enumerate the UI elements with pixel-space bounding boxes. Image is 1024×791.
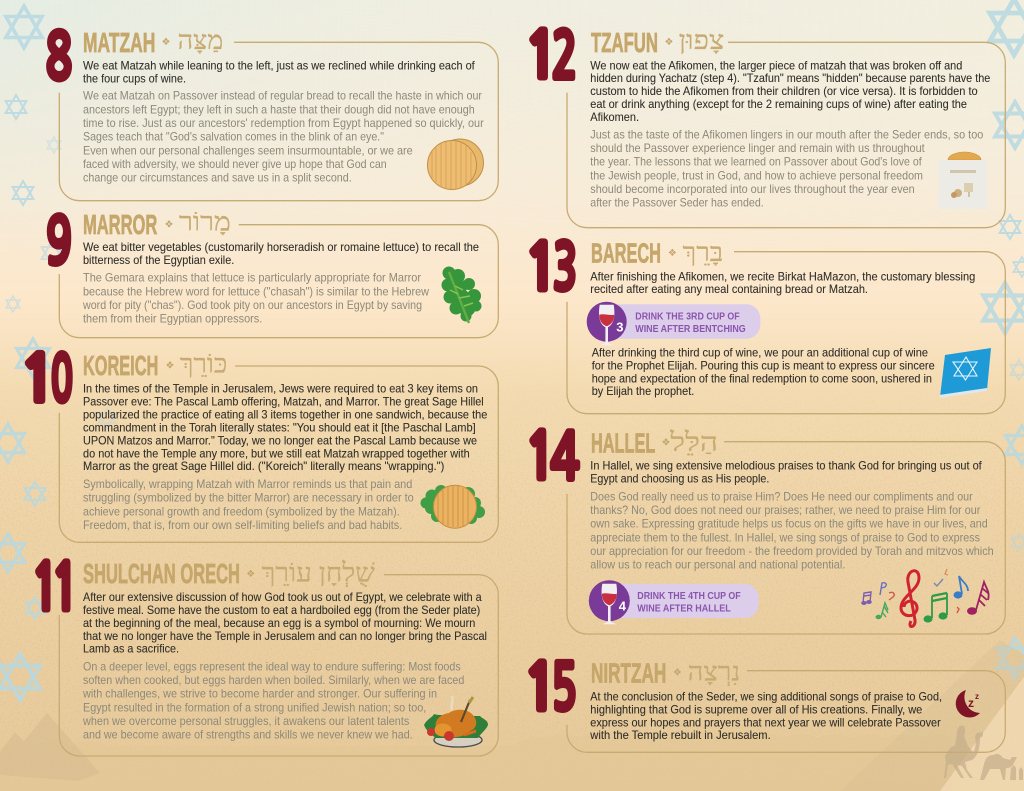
panel border [59,575,498,756]
panel: step 13 barech [525,236,1005,414]
primary text: Egypt and choosing us as His people. [590,473,769,486]
heading: Tzafun: צָפוּן [679,26,724,55]
secondary text [590,129,983,210]
primary text: hidden during Yachatz (step 4). "Tzafun" means "hidden" because parents have the [590,72,990,85]
icon: blue book [939,348,991,398]
primary text [589,690,942,742]
panel: step 12 tzafun [525,24,1005,228]
magenta note [967,582,989,615]
heading: Hallel: ❖ [662,438,671,448]
primary text: At the conclusion of the Seder, we sing additional songs of praise to God, [590,690,942,703]
step number 14 [525,425,580,489]
callout: fourth cup of wine: WINE AFTER HALLEL [637,602,731,614]
heading: Tzafun: TZAFUN [591,27,658,58]
icon: sleeping moon: z [975,692,979,701]
secondary text: because the Hebrew word for lettuce ("chasah") is similar to the Hebrew [83,285,430,298]
secondary text: Symbolically, wrapping Matzah with Marror reminds us that pain and [83,478,412,491]
secondary text: should the Passover experience linger and remain with us throughout [590,142,925,155]
secondary text: The Gemara explains that lettuce is particularly appropriate for Marror [83,272,421,285]
step number 8: 8 [46,26,72,90]
icon: camels silhouette [944,725,1023,780]
icon: wine glass [599,305,623,345]
primary text: custom to hide the Afikomen from their children (or vice versa). It is forbidden to [590,85,978,98]
step number 14: 4 [550,425,580,489]
blue note [954,576,968,599]
icon: matzah wrapped in lettuce [420,485,485,528]
secondary text: change our circumstances and save us in a split second. [83,172,352,185]
primary text [590,460,982,486]
icon: wine glass [602,584,627,624]
primary text: Marror as the great Sage Hillel did. ("Koreich" literally means "wrapping.") [83,460,444,473]
secondary text [82,660,464,742]
primary text: eat or drink anything (except for the 2 remaining cups of wine) after eating the [590,98,967,111]
panel border [567,42,1005,228]
heading: Nirtzah: NIRTZAH [591,657,666,688]
primary text [590,59,990,124]
heading: Nirtzah: נִרְצָה [688,658,740,687]
step number 14: 1 [525,427,555,489]
heading: Koreich: KOREICH [83,350,158,381]
primary text: with the Temple rebuilt in Jerusalem. [589,729,771,742]
callout: third cup of wine [587,302,760,345]
step number 12: 2 [552,24,578,88]
callout: fourth cup of wine [589,580,759,624]
secondary text: thanks? No, God does not need our praises; rather, we need to praise Him for our [590,504,980,517]
primary text: Passover eve: The Pascal Lamb offering, Matzah, and Marror. The great Sage Hillel [83,396,484,409]
heading: Shulchan Orech: SHULCHAN ORECH [83,558,240,589]
secondary text [590,490,994,572]
heading: Koreich: ❖ [166,360,175,372]
icon: matzah [428,139,484,190]
panel: step 10 koreich [20,348,498,542]
primary text [83,383,487,473]
secondary text: soften when cooked, but eggs harden when boiled. Similarly, when we are faced [83,674,464,687]
secondary text: by Elijah the prophet. [592,385,694,398]
icon: right pyramid [840,640,1024,791]
icon: music notes [861,569,989,627]
panel: step 8 matzah [46,26,498,201]
secondary text: hope and expectation of the final redemption to come soon, ushered in [592,372,932,385]
secondary text: Sages teach that "God's salvation comes in the blink of an eye." [83,131,384,144]
primary text: highlighting that God is supreme over all of His creations. Finally, we [590,703,922,716]
secondary text: Does God really need us to praise Him? Does He need our compliments and our [590,490,973,503]
step number 15 [524,656,577,720]
heading: Matzah: ❖ [162,37,171,48]
heading: Marror: מָרוֹר [179,208,231,237]
primary text [83,591,487,656]
heading: Marror: ❖ [165,220,174,230]
callout: third cup of wine: DRINK THE 3RD CUP OF [635,311,740,323]
secondary text [82,272,430,326]
step number 13: 1 [525,237,558,299]
heading: Hallel: הַלֵּל [669,428,718,457]
icon: afikomen bag [938,152,987,209]
primary text: express our hopes and prayers that next year we will celebrate Passover [590,716,941,729]
secondary text: faced with adversity, we should never give up hope that God can [83,158,387,171]
dune band [0,734,952,791]
step number 11: 1 [52,558,78,620]
icon: left pyramids [0,713,100,781]
primary text: bitterness of the Egyptian exile. [83,254,234,267]
green beamed notes [924,593,948,623]
step number 10: 0 [51,348,73,412]
secondary text: achieve personal growth and freedom (symbolized by the Matzah). [83,505,400,518]
secondary text: struggling (symbolized by the bitter Marror) are necessary in order to [83,492,414,505]
panel border [567,442,1005,634]
step number 15: 1 [524,657,557,719]
primary text [590,270,975,296]
step number 10: 1 [20,349,56,411]
primary text: at the beginning of the meal, because an egg is a symbol of mourning: We mourn [83,617,475,630]
panel border [567,671,1005,752]
primary text [83,60,475,86]
panel: step 9 marror [46,208,498,338]
primary text: do not have the Temple any more, but we still eat Matzah wrapped together with [83,447,470,460]
step number 10 [20,348,73,412]
secondary text: time to rise. Just as our ancestors' redemption from Egypt happened so quickly, our [83,117,484,130]
secondary text: our appreciation for our freedom - the freedom provided by Torah and mitzvos which [590,545,994,558]
heading: Nirtzah: ❖ [673,668,682,678]
step number 9: 9 [46,210,72,274]
secondary text: when we overcome personal struggles, it awakens our latent talents [82,715,409,728]
primary text: In the times of the Temple in Jerusalem, Jews were required to eat 3 key items on [83,383,478,396]
step number 13: 3 [553,236,577,300]
icon: wine glass: 4 [619,599,627,614]
secondary text: them from their Egyptian oppressors. [83,313,262,326]
heading: Matzah: MATZAH [83,27,155,58]
step number 11: 1 [32,558,58,620]
secondary text: and we become aware of strengths and skills we never knew we had. [83,729,413,742]
icon: lettuce leaf [442,266,482,323]
primary text: After our extensive discussion of how God took us out of Egypt, we celebrate with a [83,591,482,604]
callout: fourth cup of wine: DRINK THE 4TH CUP OF [637,590,741,602]
primary text: UPON Matzos and Marror." Today, we no longer eat the Pascal Lamb because we [83,434,477,447]
heading: Hallel: HALLEL [591,427,655,458]
panel border [59,42,498,201]
secondary text: On a deeper level, eggs represent the ideal way to endure suffering: Most foods [83,660,461,673]
icon: wine glass: 3 [616,320,623,335]
primary text: the four cups of wine. [83,72,186,86]
primary text: festive meal. Some have the custom to eat a hardboiled egg (from the Seder plate) [83,604,480,617]
secondary text: appreciate them to the fullest. In Hallel, we sing songs of praise to God to express [590,531,980,544]
secondary text: the year. The lessons that we learned on Passover about God's love of [590,156,922,169]
icon: sleeping moon: z [968,696,974,710]
step number 15: 5 [552,656,577,720]
icon: roast chicken on a plate [424,696,488,747]
secondary text: ancestors left Egypt; they left in such a haste that their dough did not have enough [83,103,475,116]
heading: Barech: בָּרֵךְ [683,238,723,267]
secondary text: Even when our personal challenges seem insurmountable, or we are [83,144,413,157]
heading: Marror: MARROR [83,209,157,240]
secondary text: Just as the taste of the Afikomen lingers in our mouth after the Seder ends, so too [590,129,983,142]
primary text: We now eat the Afikomen, the larger piece of matzah that was broken off and [590,59,962,72]
heading: Matzah: מַצָּה [178,26,223,55]
primary text: popularized the practice of eating all 3 items together in one sandwich, because the [83,409,487,422]
primary text: In Hallel, we sing extensive melodious praises to thank God for bringing us out of [590,460,982,473]
secondary text: Egypt resulted in the formation of a strong unified Jewish nation; so too, [83,701,426,714]
secondary text: for the Prophet Elijah. Pouring this cup is meant to express our sincere [592,359,935,372]
step number 12: 1 [525,26,558,88]
secondary text: the Jewish people, trust in God, and how to achieve personal freedom [590,169,923,182]
primary text: Lamb as a sacrifice. [83,643,179,656]
small notes [863,569,959,617]
panel border [59,366,498,542]
primary text: commandment in the Torah literally states: "You should eat it [the Paschal Lamb] [83,422,476,435]
treble clef [901,571,919,627]
heading: Koreich: כּוֹרֵךְ [180,350,227,379]
heading: Barech: BARECH [591,237,661,268]
secondary text: We eat Matzah on Passover instead of regular bread to recall the haste in which our [83,90,482,103]
secondary text: word for pity ("chas"). God took pity on our ancestors in Egypt by saving [82,299,422,312]
heading: Tzafun: ❖ [665,37,674,48]
heading: Barech: ❖ [668,248,677,259]
primary text: We eat bitter vegetables (customarily horseradish or romaine lettuce) to recall the [83,241,479,254]
secondary text: with challenges, we strive to become harder and stronger. Our suffering in [82,688,437,701]
primary text: We eat Matzah while leaning to the left, just as we reclined while drinking each of [83,60,475,72]
secondary text [83,90,484,185]
primary text [83,241,479,267]
secondary text: allow us to reach our personal and national potential. [590,559,845,572]
secondary text: after the Passover Seder has ended. [590,197,764,210]
secondary text: own sake. Expressing gratitude helps us focus on the gifts we have in our lives, and [590,518,988,531]
secondary text: Freedom, that is, from our own self-limiting beliefs and bad habits. [83,519,402,532]
icon: sleeping moon [956,690,980,717]
panel: step 14 hallel [525,425,1005,634]
secondary text: After drinking the third cup of wine, we pour an additional cup of wine [592,346,928,359]
heading: Shulchan Orech: ❖ [246,569,255,580]
secondary text [83,478,414,532]
heading: Shulchan Orech: שֻׁלְחָן עוֹרֵךְ [262,559,376,588]
secondary text [592,346,935,398]
callout: third cup of wine: WINE AFTER BENTCHING [635,323,746,335]
primary text: that we no longer have the Temple in Jerusalem and can no longer bring the Pascal [83,630,487,643]
primary text: recited after eating any meal containing bread or Matzah. [590,283,868,296]
panel border [567,252,1005,414]
secondary text: should become incorporated into our lives throughout the year even [590,183,915,196]
panel border [59,225,498,338]
panel: step 15 nirtzah [524,656,1005,752]
primary text: Afikomen. [590,111,639,124]
panel: step 11 shulchan orech [32,558,498,756]
primary text: After finishing the Afikomen, we recite Birkat HaMazon, the customary blessing [590,270,975,283]
